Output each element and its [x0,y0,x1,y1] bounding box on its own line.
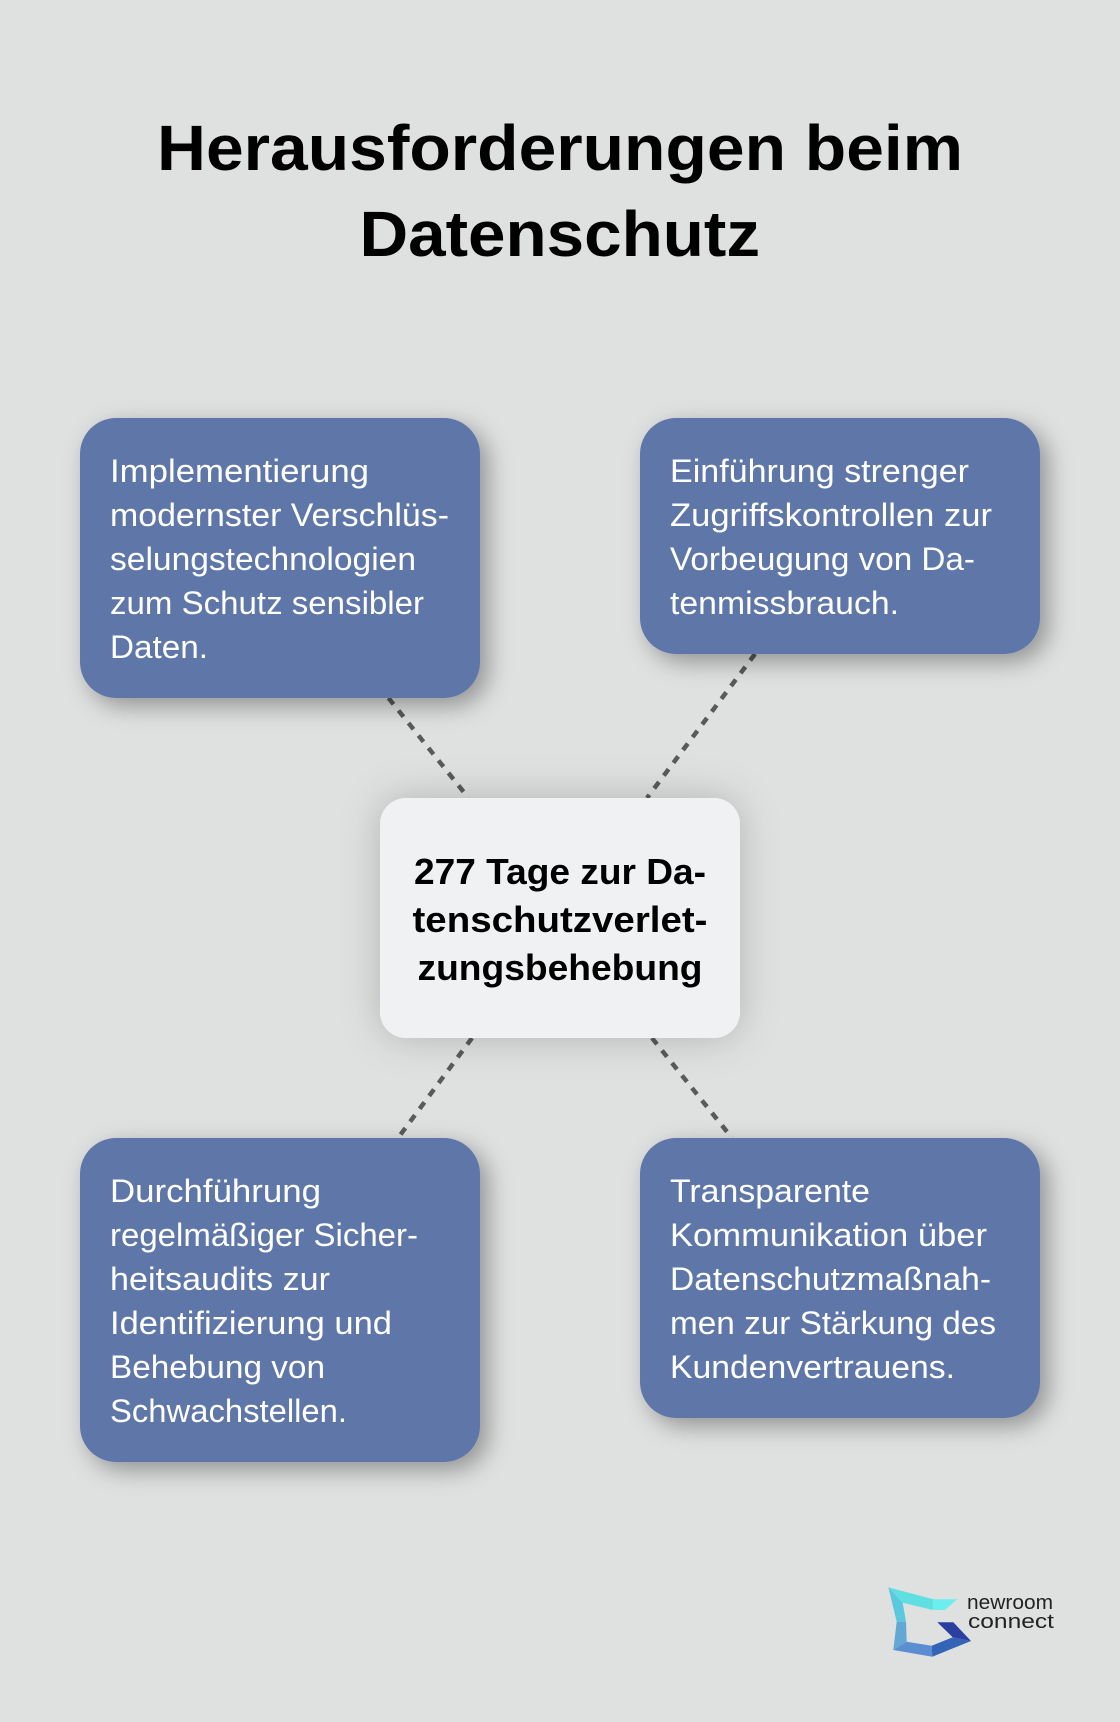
panel: central statistic: tenschutzverlet- [412,899,708,940]
panel: access control: Einführung strenger [670,453,969,489]
panel: security audits: regelmäßiger Sicher- [110,1217,418,1253]
panel: transparent communication: Transparente [670,1173,870,1209]
title: Herausforderungen beim [157,112,963,184]
panel: transparent communication [640,1138,1040,1418]
panel: access control: tenmissbrauch. [670,585,899,621]
title [157,112,963,270]
panel: encryption: selungstechnologien [110,541,416,577]
panel: encryption: zum Schutz sensibler [110,585,424,621]
panel: security audits: Identifizierung und [110,1305,392,1341]
panel: central statistic: 277 Tage zur Da- [414,851,706,892]
title: Datenschutz [360,198,760,270]
panel: transparent communication: men zur Stärkung des [670,1305,996,1341]
icon: logo mark [888,1587,971,1657]
logo: newroom connect [888,1587,1055,1657]
panel: access control [640,418,1040,654]
panel: security audits [80,1138,480,1462]
panel: security audits: Durchführung [110,1173,321,1209]
panel: central statistic: zungsbehebung [418,947,702,988]
panel: encryption: modernster Verschlüs- [110,497,449,533]
panel: encryption [80,418,480,698]
panel: encryption: Implementierung [110,453,369,489]
logo: newroom connect: newroom [967,1592,1053,1614]
panel: security audits: Schwachstellen. [110,1393,347,1429]
logo: newroom connect: connect [968,1611,1055,1633]
connector: bottom left [398,1038,472,1138]
connector: top right [647,654,755,798]
panel: security audits: heitsaudits zur [110,1261,330,1297]
panel: access control: Zugriffskontrollen zur [670,497,992,533]
panel: central statistic [380,798,740,1038]
connector: bottom right [652,1038,732,1138]
panel: access control: Vorbeugung von Da- [670,541,975,577]
panel: transparent communication: Kundenvertrauens. [670,1349,955,1385]
connector: top left [388,698,468,798]
panel: encryption: Daten. [110,629,208,665]
panel: transparent communication: Kommunikation über [670,1217,987,1253]
panel: security audits: Behebung von [110,1349,325,1385]
panel: transparent communication: Datenschutzmaßnah- [670,1261,991,1297]
